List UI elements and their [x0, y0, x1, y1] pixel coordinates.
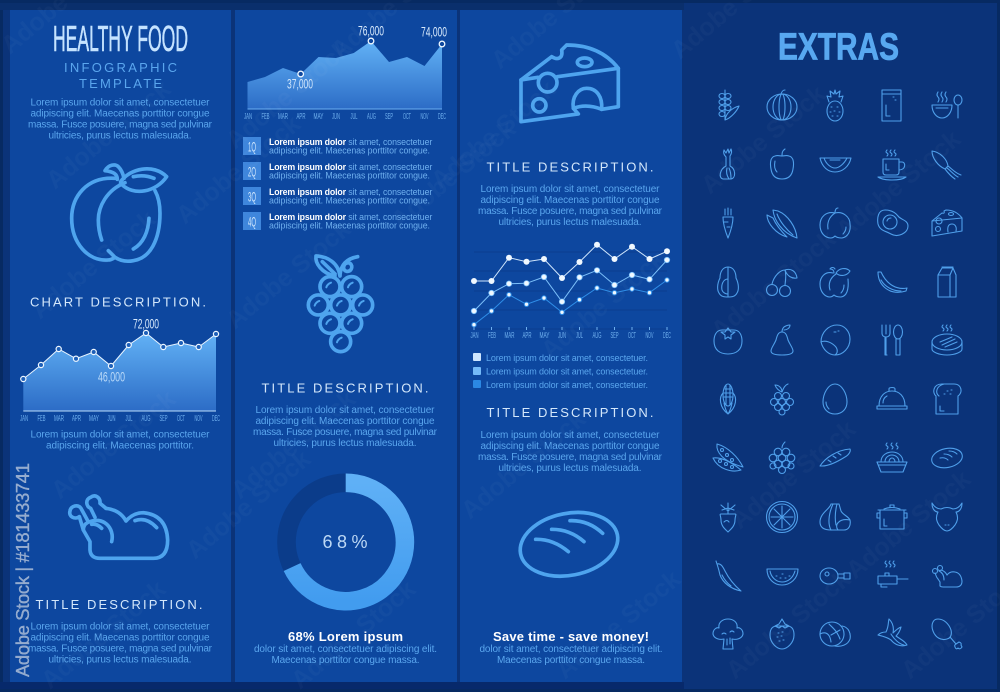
- icon: glass: [882, 90, 901, 121]
- icon: egg: [823, 384, 847, 414]
- watermark: Adobe Stock: Adobe Stock: [726, 415, 861, 535]
- line chart: three series: SEP: [610, 331, 618, 340]
- area chart: monthly values: OCT: [177, 414, 185, 423]
- area chart: yearly peaks: OCT: [403, 112, 411, 121]
- area chart: monthly values: JUL: [126, 414, 133, 423]
- chart caption: Lorem ipsum dolor sit amet, consectetuer: [30, 430, 210, 440]
- quarter 3: sit amet, consectetuer: [348, 187, 432, 197]
- icon: milk carton: [938, 267, 956, 297]
- quarter 4: sit amet, consectetuer: [348, 212, 432, 222]
- icon: avocado: [718, 267, 738, 297]
- icon: fried egg: [878, 210, 908, 235]
- quarter 3: Lorem ipsum dolor: [269, 187, 347, 197]
- quarter 4: Lorem ipsum dolor: [269, 212, 347, 222]
- chart heading: CHART DESCRIPTION.: [30, 294, 206, 310]
- closing callout: Save time - save money!: [493, 629, 649, 644]
- section text: [478, 184, 663, 228]
- area chart: yearly peaks: [244, 23, 447, 121]
- section text: Lorem ipsum dolor sit amet, consectetuer: [480, 430, 660, 441]
- icon: banana: [878, 272, 907, 292]
- icon: ham: [820, 568, 850, 584]
- area chart: monthly values: APR: [72, 414, 81, 423]
- icon: peach plain: [820, 208, 850, 238]
- icon: pasta bowl: [877, 443, 907, 472]
- intro text: ultricies, purus lectus malesuada.: [48, 130, 192, 142]
- section text: ultricies, purus lectus malesuada.: [498, 463, 642, 474]
- subtitle: [64, 60, 177, 91]
- chart legend: Lorem ipsum dolor sit amet, consectetuer.: [486, 380, 648, 390]
- icon: bread slice: [934, 384, 961, 414]
- watermark: Adobe Stock: Adobe Stock: [456, 405, 591, 525]
- section text: Lorem ipsum dolor sit amet, consectetuer: [256, 405, 435, 416]
- chart caption: adipiscing elit. Maecenas porttitor.: [46, 440, 194, 452]
- section text: Lorem ipsum dolor sit amet, consectetuer: [480, 184, 660, 195]
- area chart: yearly peaks: NOV: [420, 112, 429, 121]
- section heading: TITLE DESCRIPTION.: [486, 160, 654, 174]
- donut chart: 68%: 68%: [322, 532, 368, 552]
- quarter 2: 2Q: [248, 164, 256, 180]
- area chart: monthly values: JAN: [20, 414, 28, 423]
- area chart: monthly values: JUN: [108, 414, 116, 423]
- icon: peeled banana: [878, 619, 907, 646]
- donut caption: 68% Lorem ipsum: [288, 629, 403, 644]
- subtitle: TEMPLATE: [79, 76, 162, 91]
- quarter 1: 1Q: [248, 138, 256, 154]
- watermark: Adobe Stock: Adobe Stock: [181, 445, 316, 565]
- quarter 1: sit amet, consectetuer: [348, 137, 432, 147]
- intro text: adipiscing elit. Maecenas porttitor congue: [30, 108, 210, 120]
- icon: squid: [932, 151, 961, 179]
- area chart: yearly peaks: JUL: [350, 112, 358, 121]
- section text: [28, 622, 213, 666]
- quarter 3: adipiscing elit. Maecenas porttitor congue.: [269, 196, 430, 206]
- watermark: Adobe Stock: Adobe Stock: [551, 565, 686, 685]
- watermark: Adobe Stock: Adobe Stock: [831, 125, 966, 245]
- panel: extras icon grid: [713, 26, 964, 649]
- icon: drumstick: [932, 619, 962, 649]
- area chart: monthly values: FEB: [38, 414, 46, 423]
- chart legend: [473, 353, 648, 390]
- chart legend: Lorem ipsum dolor sit amet, consectetuer.: [486, 366, 648, 376]
- panel: cheese and line chart column: DEC: [663, 331, 671, 340]
- quarter 2: adipiscing elit. Maecenas porttitor congue.: [269, 170, 430, 180]
- icon: grape cluster: [769, 442, 795, 474]
- donut caption: dolor sit amet, consectetuer adipiscing elit.: [254, 644, 437, 655]
- watermark: Adobe Stock: Adobe Stock: [46, 385, 181, 505]
- icon: cherries: [766, 269, 797, 296]
- intro text: Lorem ipsum dolor sit amet, consectetuer: [30, 98, 210, 108]
- section text: massa. Fusce posuere, magna sed pulvinar: [28, 644, 213, 654]
- icon: pumpkin: [767, 90, 797, 120]
- watermark: Adobe Stock: Adobe Stock: [841, 465, 976, 585]
- watermark: Adobe Stock: Adobe Stock: [26, 205, 161, 325]
- area chart: monthly values: AUG: [142, 414, 150, 423]
- quarter 2: [243, 162, 432, 180]
- chart caption: [30, 430, 210, 452]
- line chart: three series: AUG: [592, 331, 602, 340]
- quarter 1: [243, 137, 432, 156]
- quarter list: [243, 137, 432, 230]
- watermark: Adobe Stock: Adobe Stock: [286, 575, 421, 692]
- section text: ultricies, purus lectus malesuada.: [48, 654, 192, 666]
- area chart: yearly peaks: FEB: [262, 112, 270, 121]
- quarter 3: 3Q: [248, 188, 256, 204]
- line chart: three series: [470, 242, 671, 340]
- area chart: yearly peaks: 74,000: [421, 24, 447, 40]
- line chart: three series: MAY: [540, 331, 550, 340]
- icon: roast chicken small: [932, 566, 962, 587]
- area chart: monthly values: 72,000: [133, 315, 159, 331]
- icon: cooking pot: [877, 505, 907, 529]
- icon: bread loaf: [515, 504, 623, 584]
- icon: carrot: [723, 208, 733, 238]
- panel: intro and chart column: DEC: [212, 414, 220, 423]
- icon: citrus slice: [766, 502, 798, 532]
- icon: beetroot: [720, 503, 736, 532]
- watermark: Adobe Stock: Adobe Stock: [226, 385, 361, 505]
- section heading: TITLE DESCRIPTION.: [486, 405, 654, 420]
- icon: wheat: [719, 90, 739, 120]
- donut caption: Maecenas porttitor congue massa.: [272, 655, 420, 666]
- line chart: three series: APR: [522, 331, 532, 340]
- subtitle: INFOGRAPHIC: [64, 60, 177, 75]
- icon: fork and spoon: [882, 325, 902, 355]
- icon: bull head: [932, 503, 962, 531]
- donut caption: [254, 629, 437, 666]
- section text: adipiscing elit. Maecenas porttitor congue: [480, 195, 660, 206]
- icon: cheese: [521, 45, 618, 122]
- section text: massa. Fusce posuere, magna sed pulvinar: [478, 452, 663, 463]
- intro text: massa. Fusce posuere, magna sed pulvinar: [28, 120, 213, 130]
- quarter 1: adipiscing elit. Maecenas porttitor congue.: [269, 146, 430, 156]
- watermark: Adobe Stock: Adobe Stock: [221, 215, 356, 335]
- icon: pea pods open: [713, 444, 743, 471]
- icon: tomato: [714, 328, 742, 354]
- area chart: monthly values: SEP: [160, 414, 168, 423]
- area chart: yearly peaks: JAN: [244, 112, 252, 121]
- chart legend: Lorem ipsum dolor sit amet, consectetuer.: [486, 353, 648, 363]
- panel: cheese and line chart column: [460, 10, 682, 682]
- watermark: Adobe Stock: Adobe Stock: [426, 75, 561, 195]
- icon: peach with leaf: [820, 268, 850, 297]
- icon: strawberry: [770, 619, 794, 649]
- line chart: three series: NOV: [646, 331, 654, 340]
- quarter 2: Lorem ipsum dolor: [269, 162, 347, 172]
- area chart: yearly peaks: DEC: [438, 112, 446, 121]
- closing callout: Maecenas porttitor congue massa.: [497, 655, 645, 666]
- panel: intro and chart column: [10, 10, 231, 682]
- icon: small grapes: [770, 384, 794, 415]
- quarter 4: adipiscing elit. Maecenas porttitor congue.: [269, 220, 430, 230]
- icon: peach: [72, 165, 167, 261]
- watermark: Adobe Stock: Adobe Stock: [721, 565, 856, 685]
- watermark: Adobe Stock: Adobe Stock: [696, 80, 831, 200]
- icon: pineapple: [827, 90, 843, 121]
- watermark: Adobe Stock: Adobe Stock: [536, 245, 671, 365]
- area chart: yearly peaks: APR: [296, 112, 306, 121]
- area chart: yearly peaks: JUN: [332, 112, 340, 121]
- intro text: [28, 98, 213, 142]
- line chart: three series: JAN: [470, 331, 479, 340]
- watermark: Adobe Stock: Adobe Stock: [41, 75, 176, 195]
- icon: bread loaf small: [930, 446, 964, 470]
- section text: ultricies, purus lectus malesuada.: [498, 217, 642, 228]
- icon: garlic: [820, 504, 850, 530]
- section text: massa. Fusce posuere, magna sed pulvinar: [478, 206, 663, 217]
- section heading: TITLE DESCRIPTION.: [36, 597, 202, 612]
- area chart: yearly peaks: MAR: [278, 112, 288, 121]
- line chart: three series: JUL: [576, 331, 583, 340]
- area chart: monthly values: NOV: [194, 414, 203, 423]
- line chart: three series: MAR: [504, 331, 515, 340]
- quarter 4: [243, 212, 432, 230]
- icon: mango halves: [821, 325, 850, 355]
- section heading: TITLE DESCRIPTION.: [262, 380, 428, 396]
- closing callout: [480, 629, 662, 666]
- watermark: Adobe Stock: Adobe Stock: [706, 225, 841, 345]
- icon: cloche: [877, 388, 907, 409]
- line chart: three series: OCT: [628, 331, 636, 340]
- section text: adipiscing elit. Maecenas porttitor congue: [30, 632, 210, 644]
- panel: intro and chart column: HEALTHY FOOD: [53, 18, 188, 59]
- icon: pear: [771, 325, 793, 355]
- quarter 4: 4Q: [248, 214, 256, 230]
- area chart: monthly values: MAY: [89, 414, 99, 423]
- icon: chili pepper: [716, 561, 741, 591]
- closing callout: dolor sit amet, consectetuer adipiscing elit.: [480, 644, 662, 655]
- panel: quarters and donut column: [235, 10, 457, 682]
- icon: coffee cup: [878, 150, 906, 180]
- icon: bell pepper: [770, 149, 794, 179]
- icon: frying pan: [878, 561, 908, 587]
- line chart: three series: FEB: [488, 331, 496, 340]
- quarter 2: sit amet, consectetuer: [348, 162, 432, 172]
- donut chart: 68%: [286, 483, 405, 601]
- area chart: monthly values: 46,000: [98, 369, 125, 385]
- icon: cheese wedge: [932, 210, 962, 236]
- icon: roast chicken: [70, 496, 168, 558]
- watermark: Adobe Stock: Adobe Stock: [171, 110, 306, 230]
- section text: massa. Fusce posuere, magna sed pulvinar: [253, 427, 438, 438]
- line chart: three series: JUN: [558, 331, 566, 340]
- watermark: Adobe Stock: Adobe Stock: [221, 35, 356, 155]
- icon: grapes: [308, 256, 373, 352]
- section text: adipiscing elit. Maecenas porttitor congue: [480, 441, 660, 452]
- extras heading: EXTRAS: [778, 26, 899, 68]
- area chart: yearly peaks: 76,000: [358, 23, 384, 39]
- section text: Lorem ipsum dolor sit amet, consectetuer: [30, 622, 210, 632]
- area chart: yearly peaks: MAY: [314, 112, 324, 121]
- quarter 1: Lorem ipsum dolor: [269, 137, 347, 147]
- quarter 3: [243, 187, 432, 206]
- area chart: monthly values: [20, 315, 220, 423]
- section text: ultricies, purus lectus malesuada.: [274, 438, 416, 449]
- icon: onion: [720, 149, 735, 179]
- section text: adipiscing elit. Maecenas porttitor congue: [256, 416, 435, 427]
- icon: watermelon: [767, 569, 798, 585]
- icon: melon slice: [820, 158, 851, 172]
- stock image id label: Adobe Stock | #181433741: [12, 463, 33, 677]
- area chart: monthly values: MAR: [54, 414, 64, 423]
- icon: steak: [932, 325, 962, 355]
- section text: [478, 430, 663, 474]
- watermark: Adobe Stock: Adobe Stock: [386, 115, 521, 235]
- icon: broccoli: [713, 619, 743, 649]
- icon: soup bowl: [932, 92, 962, 118]
- section text: [253, 405, 438, 449]
- icon: cabbage: [820, 622, 850, 646]
- area chart: yearly peaks: 37,000: [287, 75, 313, 91]
- icon: baguette: [820, 449, 850, 466]
- area chart: yearly peaks: AUG: [367, 112, 376, 121]
- watermark: Adobe Stock: Adobe Stock: [36, 575, 171, 692]
- area chart: yearly peaks: SEP: [385, 112, 393, 121]
- icon: pea pods: [767, 210, 797, 238]
- icon: corn: [720, 384, 736, 414]
